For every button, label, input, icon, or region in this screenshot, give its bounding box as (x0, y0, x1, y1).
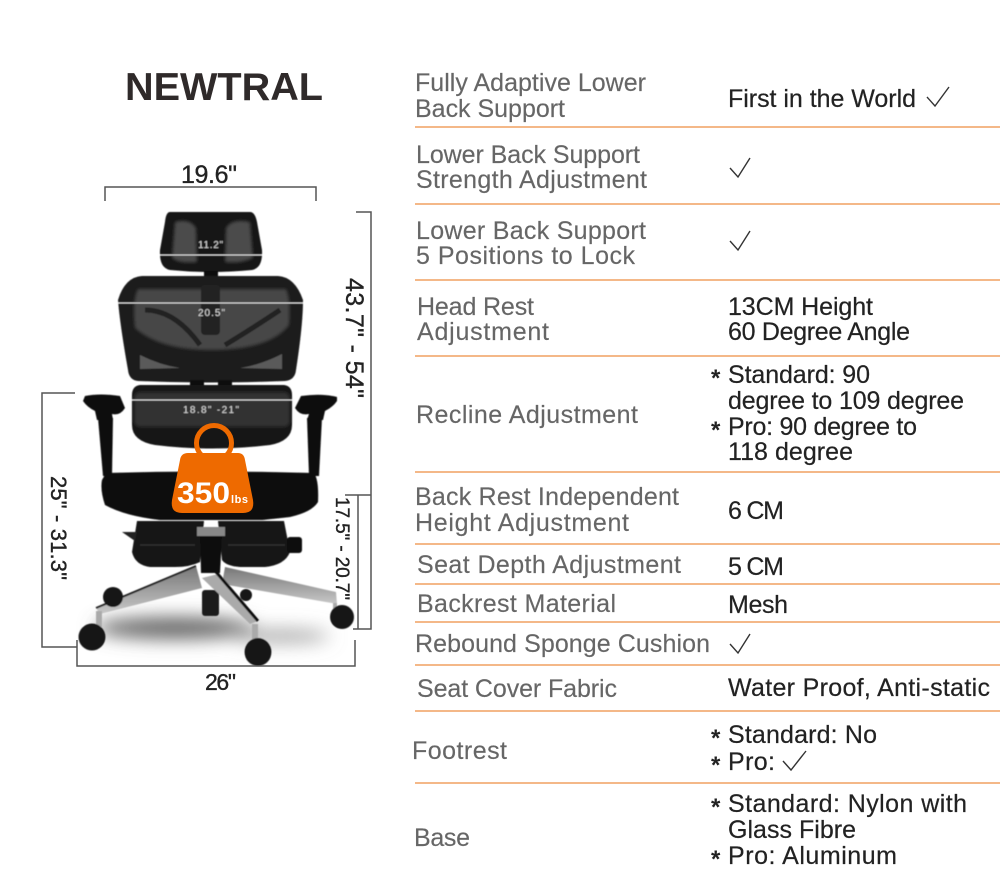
row: footrest: * (711, 752, 721, 779)
row: base: Pro: Aluminum (728, 842, 897, 870)
row: recline adjustment (415, 361, 1000, 472)
row: backrest material (415, 590, 1000, 622)
row: back rest independent height adjustment: 6 CM (728, 497, 784, 525)
row: lower back support strength adjustment (415, 141, 1000, 204)
row: rebound sponge cushion: Rebound Sponge Cushion (415, 630, 710, 658)
row: footrest (412, 721, 1000, 783)
dimension: overall width: 19.6" (181, 161, 237, 189)
dimension: overall height (340, 212, 371, 629)
weight badge: 350 lbs (172, 426, 253, 513)
row: base: Glass Fibre (728, 816, 856, 844)
inner measurement labels: 20.5" (198, 308, 225, 319)
inner measurement labels: 18.8" -21" (183, 405, 239, 416)
row: seat cover fabric: Water Proof, Anti-static (728, 674, 990, 702)
row: base: Standard: Nylon with (728, 790, 967, 818)
row: seat cover fabric: Seat Cover Fabric (417, 675, 617, 703)
dimension: base width (77, 640, 355, 695)
weight badge: 350 lbs: 350 (177, 477, 230, 510)
row: back rest independent height adjustment: Back Rest Independent (415, 483, 679, 511)
row: head rest adjustment: 60 Degree Angle (728, 318, 910, 346)
row: head rest adjustment: Adjustment (417, 318, 549, 346)
row: recline adjustment: * (711, 365, 721, 392)
row: seat cover fabric (415, 674, 1000, 711)
lower back support (132, 385, 292, 448)
headrest (160, 212, 262, 277)
row: fully adaptive lower back support: Fully Adaptive Lower (415, 69, 646, 97)
row: footrest: Footrest (412, 737, 507, 765)
dimension: overall width (105, 161, 316, 201)
weight badge: 350 lbs: lbs (231, 494, 248, 506)
row: seat depth adjustment: 5 CM (728, 553, 784, 581)
row: recline adjustment: Recline Adjustment (416, 401, 638, 429)
row: fully adaptive lower back support (415, 69, 1000, 127)
row: backrest material: Mesh (728, 591, 788, 619)
backrest (118, 276, 303, 386)
row: seat depth adjustment (415, 551, 1000, 584)
row: head rest adjustment: Head Rest (417, 293, 534, 321)
row: head rest adjustment (415, 293, 1000, 356)
row: recline adjustment: degree to 109 degree (728, 387, 964, 415)
row: footrest: Pro: (728, 748, 775, 776)
row: backrest material: Backrest Material (417, 590, 616, 618)
row: lower back support 5 positions (415, 217, 1000, 280)
star base (96, 527, 337, 640)
row: seat depth adjustment: Seat Depth Adjustment (417, 551, 681, 579)
row: recline adjustment: Standard: 90 (728, 361, 870, 389)
row: footrest: * (711, 725, 721, 752)
left armrest (83, 394, 125, 476)
dimension: overall height: 43.7" - 54" (340, 278, 368, 398)
row: recline adjustment: Pro: 90 degree to (728, 413, 917, 441)
row: lower back support strength adjustment: Lower Back Support (416, 141, 640, 169)
row: back rest independent height adjustment (415, 483, 1000, 544)
logo: NEWTRAL: NEWTRAL (125, 66, 323, 109)
row: rebound sponge cushion (415, 630, 1000, 665)
specification table (412, 69, 1000, 870)
dimension: base width: 26" (205, 669, 236, 695)
row: base (414, 790, 967, 870)
inner measurement labels (183, 240, 239, 416)
row: back rest independent height adjustment: Height Adjustment (415, 509, 629, 537)
dimension: armrest height (42, 393, 77, 647)
row: footrest: Standard: No (728, 721, 877, 749)
dimension: armrest height: 25" - 31.3" (46, 476, 71, 580)
casters (78, 587, 354, 666)
seat (101, 472, 318, 520)
footrest (122, 521, 302, 567)
row: lower back support 5 positions: Lower Back Support (416, 217, 646, 245)
row: fully adaptive lower back support: First in the World (728, 85, 916, 113)
row: base: * (711, 794, 721, 821)
row: recline adjustment: 118 degree (728, 438, 853, 466)
row: lower back support 5 positions: 5 Positions to Lock (416, 242, 636, 270)
row: base: Base (414, 824, 470, 852)
inner measurement labels: 11.2" (198, 240, 223, 251)
dimension: seat height: 17.5" - 20.7" (331, 497, 352, 600)
right armrest (295, 395, 337, 476)
row: recline adjustment: * (711, 417, 721, 444)
row: fully adaptive lower back support: Back Support (415, 95, 565, 123)
row: lower back support strength adjustment: Strength Adjustment (416, 166, 647, 194)
row: head rest adjustment: 13CM Height (728, 293, 873, 321)
floor shadow (95, 617, 330, 643)
chair illustration (78, 212, 354, 666)
